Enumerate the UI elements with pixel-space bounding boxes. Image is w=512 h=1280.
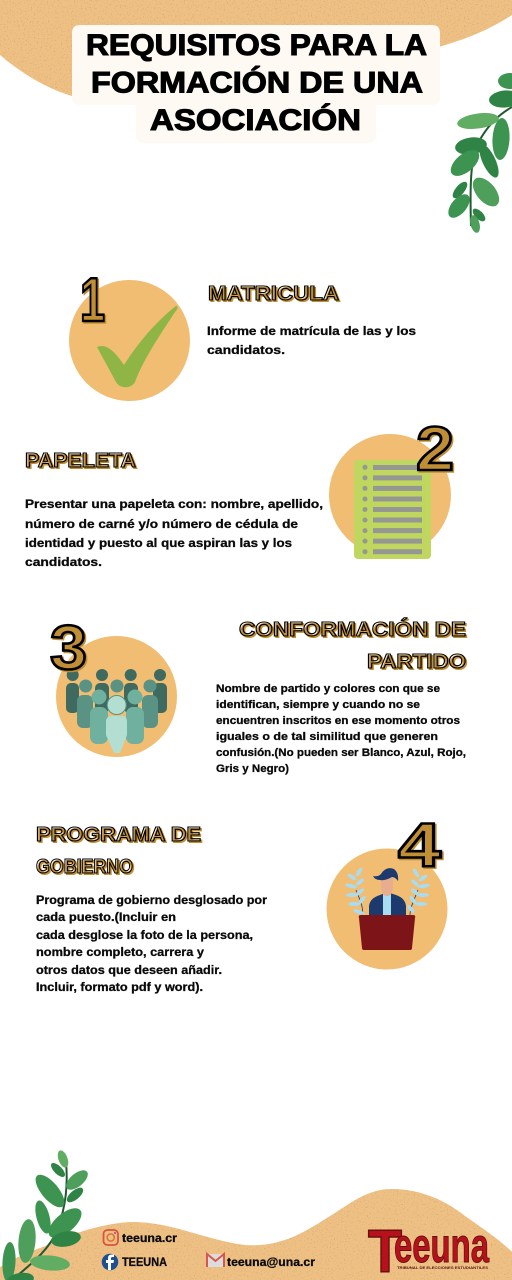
laurels xyxy=(345,867,430,916)
text: programa de gobierno: Programa de gobierno desglosado por xyxy=(36,893,267,907)
number 2: 2 xyxy=(416,415,454,484)
speaker xyxy=(369,868,406,915)
text: papeleta: identidad y puesto al que aspiran las y los xyxy=(25,536,292,550)
text: papeleta: Presentar una papeleta con: nombre, apellido, xyxy=(25,497,323,511)
icon: group of people xyxy=(56,636,177,757)
title background xyxy=(72,25,440,143)
icon: facebook xyxy=(102,1254,118,1270)
top tan shape xyxy=(0,0,512,99)
icon: ballot on circle xyxy=(329,434,451,559)
heading: matricula: MATRICULA xyxy=(208,283,339,305)
logo: teeuna: TRIBUNAL DE ELECCIONES ESTUDIANTILES xyxy=(397,1266,489,1270)
icon: instagram xyxy=(104,1230,118,1245)
text: programa de gobierno: otros datos que deseen añadir. xyxy=(36,963,222,977)
icon: speaker at podium xyxy=(326,848,448,970)
heading: conformacion de partido: CONFORMACIÓN DE xyxy=(239,617,466,641)
text: programa de gobierno: cada desglose la foto de la persona, xyxy=(36,928,253,942)
text: conformacion de partido: identifican, siempre y cuando no se xyxy=(216,699,420,711)
footer contacts xyxy=(102,1230,315,1270)
title text: FORMACIÓN DE UNA xyxy=(91,66,423,100)
step 2 xyxy=(25,415,454,569)
text: matricula: Informe de matrícula de las y los xyxy=(207,324,416,338)
text: papeleta: candidatos. xyxy=(25,555,102,569)
title xyxy=(72,25,440,143)
text: programa de gobierno: nombre completo, carrera y xyxy=(36,945,204,959)
number 3: 3 xyxy=(50,614,87,683)
text: programa de gobierno xyxy=(36,893,267,994)
text: conformacion de partido xyxy=(216,683,466,775)
icon: checkmark circle xyxy=(69,280,190,401)
text: conformacion de partido: iguales o de tal similitud que generen xyxy=(216,731,438,743)
title text xyxy=(86,29,427,137)
text: conformacion de partido: Gris y Negro) xyxy=(216,763,289,775)
step 3 xyxy=(50,614,466,775)
text: matricula xyxy=(207,324,416,357)
facebook handle: TEEUNA xyxy=(122,1255,167,1269)
number 1: 1 xyxy=(80,266,105,335)
heading: conformacion de partido xyxy=(239,617,466,673)
number 4: 4 xyxy=(398,811,442,880)
title text: ASOCIACIÓN xyxy=(150,103,361,137)
text: conformacion de partido: Nombre de partido y colores con que se xyxy=(216,683,440,695)
text: papeleta xyxy=(25,497,323,569)
icon: top right leaves xyxy=(444,73,512,234)
text: papeleta: número de carné y/o número de cédula de xyxy=(25,517,298,531)
logo: teeuna xyxy=(368,1218,489,1280)
heading: programa de gobierno: PROGRAMA DE xyxy=(36,824,201,846)
icon: bottom left leaves xyxy=(1,1149,91,1280)
text: matricula: candidatos. xyxy=(207,343,285,357)
heading: conformacion de partido: PARTIDO xyxy=(367,651,466,673)
bottom tan wave xyxy=(0,1189,512,1280)
heading: programa de gobierno xyxy=(36,824,201,878)
text: programa de gobierno: cada puesto.(Incluir en xyxy=(36,910,176,924)
step 4 xyxy=(36,811,448,994)
heading: papeleta: PAPELETA xyxy=(25,450,136,472)
podium xyxy=(359,915,415,950)
title text: REQUISITOS PARA LA xyxy=(86,29,427,62)
icon: email xyxy=(207,1254,224,1267)
email address: teeuna@una.cr xyxy=(227,1255,315,1269)
instagram handle: teeuna.cr xyxy=(122,1231,177,1245)
step 1 xyxy=(69,266,416,401)
text: conformacion de partido: confusión.(No pueden ser Blanco, Azul, Rojo, xyxy=(216,747,466,759)
text: programa de gobierno: Incluir, formato pdf y word). xyxy=(36,980,203,994)
heading: programa de gobierno: GOBIERNO xyxy=(36,856,133,878)
text: conformacion de partido: encuentren inscritos en ese momento otros xyxy=(216,715,460,727)
